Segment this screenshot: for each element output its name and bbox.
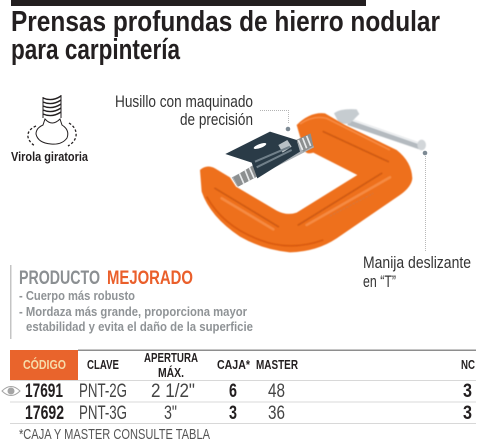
table row 17692: 3	[463, 403, 472, 424]
table header: CAJA*	[217, 357, 251, 372]
table row 17691: 6	[229, 381, 237, 402]
callout: Husillo con maquinado de precisión: de precisión	[180, 110, 253, 129]
T handle	[334, 109, 426, 150]
footnote: *CAJA Y MASTER CONSULTE TABLA	[19, 427, 210, 443]
feature list: - Cuerpo más robusto	[19, 288, 135, 303]
table row 17692: 36	[268, 403, 285, 424]
table row 17692: 3	[229, 403, 237, 424]
product photo: C clamp	[200, 109, 426, 252]
table row 17691	[25, 381, 472, 402]
table header: CÓDIGO	[23, 357, 66, 372]
heading: producto mejorado	[19, 268, 193, 289]
table row 17691: 17691	[25, 381, 63, 402]
table row 17692: PNT-3G	[79, 403, 127, 424]
title	[11, 6, 440, 66]
icon: swivel ferrule	[28, 95, 76, 146]
callout: Husillo con maquinado de precisión	[115, 92, 290, 131]
heading: producto mejorado: PRODUCTO	[19, 268, 100, 289]
table header: MASTER	[256, 357, 298, 372]
panel: producto mejorado	[10, 265, 253, 339]
title: para carpintería	[11, 34, 181, 66]
product table	[2, 350, 476, 424]
table row 17691: 2 1/2"	[151, 381, 195, 402]
table row 17691: 3	[463, 381, 472, 402]
table row 17691: 48	[268, 381, 285, 402]
table row 17692	[25, 403, 472, 424]
table header	[10, 350, 475, 380]
table row 17691: PNT-2G	[79, 381, 127, 402]
top black bar	[11, 0, 366, 6]
table header: MÁX.	[158, 365, 184, 380]
table header: CLAVE	[87, 357, 119, 372]
table row 17692: 17692	[25, 403, 64, 424]
screw	[232, 133, 314, 187]
feature list: estabilidad y evita el daño de la superficie	[26, 319, 253, 334]
icon: eye	[2, 386, 20, 396]
feature list	[19, 288, 253, 334]
callout: Manija deslizante en "T"	[363, 151, 471, 291]
table header: APERTURA	[144, 350, 198, 365]
table header: NC	[461, 357, 475, 372]
callout: Husillo con maquinado de precisión: Husillo con maquinado	[115, 92, 253, 111]
table row 17692: 3"	[164, 403, 177, 424]
clamp body	[200, 113, 412, 252]
feature list: - Mordaza más grande, proporciona mayor	[19, 304, 247, 319]
packaging card	[225, 132, 300, 178]
icon label: Virola giratoria: Virola giratoria	[11, 150, 89, 164]
heading: producto mejorado: MEJORADO	[107, 268, 193, 289]
callout: Manija deslizante en "T": en “T”	[363, 272, 396, 291]
clamp highlights and grooves	[207, 117, 390, 246]
